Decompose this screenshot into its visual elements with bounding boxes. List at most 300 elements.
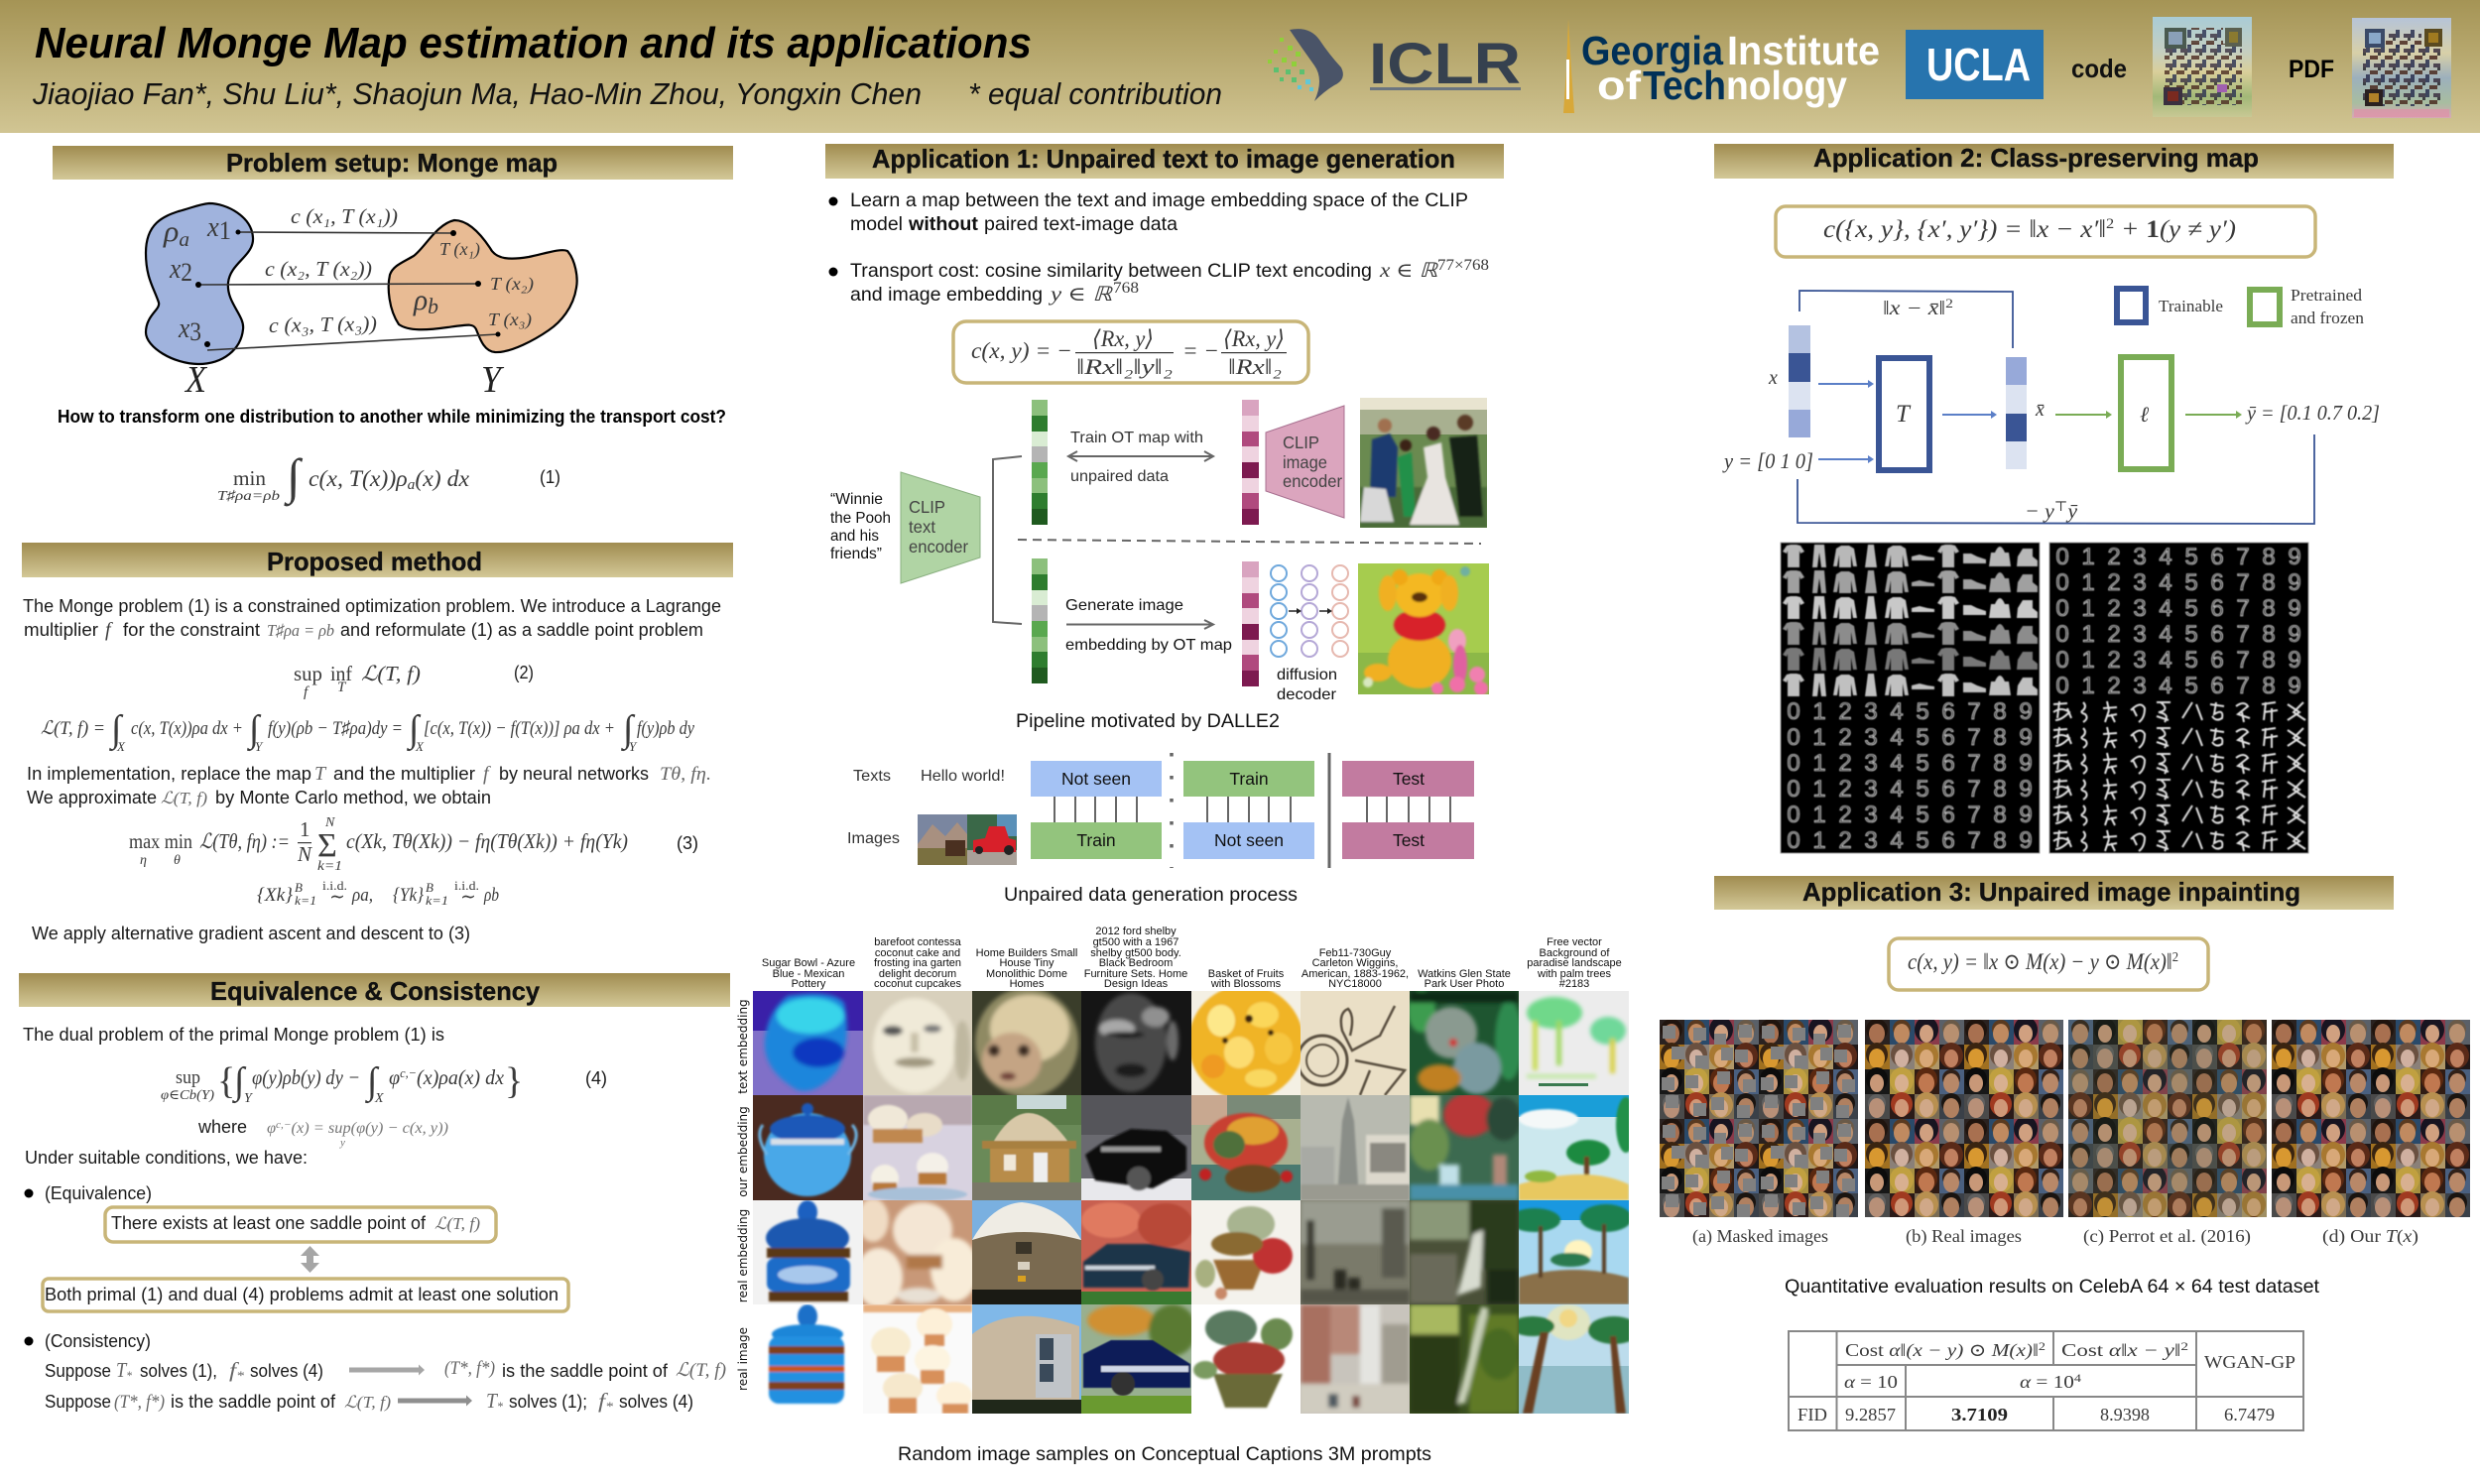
equation 3: max min bbox=[129, 829, 192, 853]
text embedding column top bbox=[1032, 400, 1048, 525]
table: FID results: 8.9398 bbox=[2100, 1405, 2150, 1424]
caption: quantitative evaluation: Quantitative evaluation results on CelebA 64 × 64 test dataset bbox=[1785, 1276, 2320, 1298]
image: palms text embedding bbox=[1519, 991, 1629, 1095]
group: test: Test bbox=[1393, 830, 1425, 850]
sampling definition: ρa, bbox=[351, 885, 373, 906]
sampling definition: B bbox=[295, 880, 303, 895]
output vector x-bar bbox=[2006, 357, 2045, 469]
diagram: Monge map between distributions: a bbox=[179, 229, 189, 251]
image: palms real embedding bbox=[1519, 1200, 1629, 1304]
heading: problem setup bbox=[53, 146, 733, 180]
callout: cosine cost equation: = − bbox=[1182, 338, 1219, 363]
image: city our embedding bbox=[1301, 1095, 1410, 1200]
heading: proposed method: Proposed method bbox=[267, 547, 482, 576]
equation 1: c(x, T(x))ρ bbox=[309, 466, 405, 491]
Lagrangian expansion: X bbox=[415, 739, 425, 754]
paragraph: Lagrange multiplier: The Monge problem (1) is a constrained optimization problem. We introduce a Lagrange bbox=[23, 595, 721, 616]
panel: problem setup bbox=[53, 146, 733, 507]
digit samples left: 0123456789 bbox=[1787, 698, 2033, 725]
consistency statement 2: (T*, f*) bbox=[114, 1392, 165, 1413]
paragraph: implementation: In implementation, replace the map bbox=[27, 763, 311, 784]
label: generate image bbox=[1065, 597, 1232, 654]
digit samples right: 0123456789 bbox=[2055, 595, 2301, 622]
loss bracket: classification: ⊤ bbox=[2054, 500, 2067, 515]
caption: unpaired data: Unpaired data generation process bbox=[1004, 884, 1298, 906]
paragraph: implementation: Tθ, fη. bbox=[660, 764, 711, 785]
Lagrangian expansion: X bbox=[116, 739, 126, 754]
loss bracket: classification: − y bbox=[2025, 499, 2053, 523]
diffusion decoder bbox=[1271, 565, 1348, 703]
callout: cosine cost equation: c(x, y) = − bbox=[971, 338, 1072, 363]
group: text not seen / image train: Not seen bbox=[1061, 769, 1131, 789]
heading: problem setup: Problem setup: Monge map bbox=[226, 148, 558, 178]
paragraph: implementation: We approximate bbox=[27, 787, 157, 807]
equation 4: X bbox=[374, 1091, 384, 1106]
equation 2 bbox=[294, 662, 534, 700]
column prompts: delight decorum bbox=[879, 968, 956, 980]
diagram: Monge map between distributions: c (x₂, T (x₂)) bbox=[265, 257, 372, 281]
prompt text bbox=[830, 491, 891, 562]
column prompts: with Blossoms bbox=[1210, 978, 1282, 990]
callout: class cost equation: 2 bbox=[2106, 216, 2114, 232]
image: cupcakes our embedding bbox=[863, 1095, 972, 1200]
bullet: transport cost: 768 bbox=[1113, 280, 1139, 297]
digit samples right: 0123456789 bbox=[2055, 647, 2301, 674]
heading: equivalence and consistency: Equivalence & Consistency bbox=[210, 976, 541, 1006]
equation 4: { bbox=[217, 1060, 235, 1102]
logo: Georgia Tech bbox=[1563, 19, 1880, 113]
column prompts: Basket of Fruits bbox=[1208, 968, 1285, 980]
diagram: unpaired data generation: Images bbox=[847, 830, 900, 847]
diagram: Monge map between distributions: T (x₃) bbox=[488, 309, 532, 330]
sampling definition: ∼ bbox=[460, 887, 476, 908]
label: train OT map bbox=[1068, 430, 1213, 485]
column prompts: Home Builders Small bbox=[976, 947, 1077, 959]
bullet: learn a map: Learn a map between the text and image embedding space of the CLIP bbox=[850, 189, 1468, 211]
Lagrangian expansion: ∫ bbox=[407, 708, 422, 752]
input vector x bbox=[1768, 325, 1810, 437]
digit samples right: 0123456789 bbox=[2055, 621, 2301, 648]
captions: inpainting figures: (b) Real images bbox=[1906, 1226, 2022, 1247]
consistency statement 2: Suppose bbox=[45, 1391, 111, 1412]
equation 4: φ∈Cb(Y) bbox=[161, 1088, 214, 1103]
image: sketch text embedding bbox=[1301, 991, 1410, 1095]
column prompts: coconut cupcakes bbox=[874, 978, 962, 990]
equation 4: (x)ρa(x) dx bbox=[417, 1065, 505, 1089]
diffusion decoder: decoder bbox=[1277, 686, 1337, 703]
heading: equivalence and consistency bbox=[19, 973, 730, 1007]
paragraph: implementation: f bbox=[483, 763, 491, 785]
paragraph: Lagrange multiplier bbox=[23, 595, 721, 641]
diagram: Monge map between distributions: T (x₁) bbox=[439, 239, 480, 260]
image: cupcakes text embedding bbox=[863, 991, 972, 1095]
frozen box l bbox=[2121, 357, 2171, 469]
equation 3: c(Xk, Tθ(Xk)) − fη(Tθ(Xk)) + fη(Yk) bbox=[346, 829, 628, 853]
consistency statement 2: solves (4) bbox=[619, 1391, 693, 1412]
captions: inpainting figures bbox=[1692, 1226, 2418, 1247]
callout: cosine cost equation bbox=[953, 321, 1308, 383]
sampling definition: ∼ bbox=[329, 887, 345, 908]
callout: saddle point exists bbox=[105, 1207, 496, 1242]
table: FID results: FID bbox=[1798, 1405, 1827, 1424]
column prompts: 2012 ford shelby bbox=[1095, 926, 1177, 937]
logo: ICLR: ICLR bbox=[1369, 32, 1521, 96]
legend: pretrained and frozen bbox=[2250, 286, 2365, 327]
where clause: φ bbox=[267, 1120, 276, 1137]
where clause: where bbox=[197, 1116, 247, 1137]
column prompts: with palm trees bbox=[1537, 968, 1611, 980]
callout: primal and dual solutions: Both primal (1) and dual (4) problems admit at least one solution bbox=[45, 1284, 558, 1304]
equation 2: sup bbox=[294, 662, 322, 685]
bullet: learn a map: paired text-image data bbox=[984, 213, 1178, 235]
column prompts: Free vector bbox=[1547, 936, 1602, 948]
equation 3: N bbox=[297, 842, 312, 866]
image: cupcakes real image bbox=[863, 1304, 972, 1414]
diagram: Monge map between distributions: 1 bbox=[219, 216, 231, 245]
diagram: unpaired data generation bbox=[847, 753, 1474, 868]
Lagrangian expansion: Y bbox=[255, 739, 264, 754]
Lagrangian expansion: [c(x, T(x)) − f(T(x))] ρa dx + bbox=[424, 718, 615, 739]
image: fruit real embedding bbox=[1191, 1200, 1301, 1304]
table: FID results: 9.2857 bbox=[1845, 1405, 1896, 1424]
image embedding column top bbox=[1242, 400, 1259, 525]
Lagrangian expansion: ∫ bbox=[109, 708, 124, 752]
arrow: equivalence both ways bbox=[301, 1246, 319, 1273]
transport lines bbox=[198, 232, 498, 350]
CLIP text encoder: text bbox=[909, 517, 935, 537]
bullet: transport cost: 77×768 bbox=[1437, 257, 1489, 274]
captions: inpainting figures: (c) Perrot et al. (2016) bbox=[2083, 1226, 2251, 1247]
equation 4: ∫ bbox=[365, 1060, 380, 1104]
image: yurt real image bbox=[972, 1304, 1081, 1414]
equation 3: (3) bbox=[677, 832, 698, 853]
figure: FashionMNIST and MNIST samples bbox=[1781, 543, 2308, 854]
equation 3: k=1 bbox=[317, 859, 342, 874]
column prompts: American, 1883-1962, bbox=[1302, 968, 1409, 980]
column prompts: Park User Photo bbox=[1425, 978, 1504, 990]
equation 2: ℒ(T, f) bbox=[361, 662, 421, 685]
column prompts: gt500 with a 1967 bbox=[1093, 936, 1178, 948]
diagram: Monge map between distributions: ρ bbox=[164, 215, 178, 248]
logo: Georgia Tech: of bbox=[1597, 62, 1641, 108]
table: FID results: α = 10 bbox=[1844, 1372, 1898, 1392]
bullet: consistency: (Consistency) bbox=[45, 1330, 151, 1351]
group: test: Test bbox=[1393, 769, 1425, 789]
image: city painting real image bbox=[1301, 1304, 1410, 1414]
image: dome text embedding bbox=[972, 991, 1081, 1095]
callout: saddle point exists: There exists at least one saddle point of bbox=[111, 1212, 427, 1233]
label: generate image: embedding by OT map bbox=[1065, 637, 1232, 654]
bullet: transport cost bbox=[829, 257, 1489, 306]
table: FID results: WGAN-GP bbox=[2204, 1352, 2295, 1372]
equation 4: ∫ bbox=[232, 1060, 247, 1104]
figure: real images bbox=[1865, 1020, 2063, 1217]
diffusion decoder: diffusion bbox=[1277, 667, 1337, 683]
text embedding column bottom bbox=[1032, 558, 1048, 683]
digit samples left: 0123456789 bbox=[1787, 750, 2033, 777]
logo: UCLA: UCLA bbox=[1926, 39, 2031, 90]
image: fruit our embedding bbox=[1191, 1095, 1301, 1200]
image: sugar bowl real embedding bbox=[753, 1200, 863, 1304]
heading: application 1: Application 1: Unpaired text to image generation bbox=[872, 144, 1455, 174]
header banner bbox=[0, 0, 2480, 133]
heading: application 2: Application 2: Class-preserving map bbox=[1813, 143, 2259, 173]
image: palms real image bbox=[1519, 1304, 1629, 1414]
image: monkey text embedding bbox=[1410, 991, 1519, 1095]
paragraph: Lagrange multiplier: multiplier bbox=[24, 619, 98, 640]
image: waterfall real embedding bbox=[1410, 1200, 1519, 1304]
sampling definition: i.i.d. bbox=[322, 878, 347, 893]
digit samples right: 0123456789 bbox=[2055, 569, 2301, 596]
sampling definition: ρb bbox=[483, 885, 499, 906]
table: FID results: Cost α‖(x − y) ⊙ M(x)‖ bbox=[1845, 1340, 2016, 1360]
paragraph: Lagrange multiplier: and reformulate (1) as a saddle point problem bbox=[340, 619, 703, 640]
sampling definition: {Xk} bbox=[257, 885, 293, 906]
equation 2: (2) bbox=[514, 662, 534, 682]
CLIP image encoder: image bbox=[1283, 452, 1327, 472]
group: test bbox=[1342, 761, 1474, 859]
image: street real embedding bbox=[1301, 1200, 1410, 1304]
paragraph: Lagrange multiplier: f bbox=[105, 619, 113, 641]
column prompts: House Tiny bbox=[999, 957, 1054, 969]
prompt text: the Pooh bbox=[830, 510, 891, 527]
heading: application 2 bbox=[1714, 143, 2394, 179]
consistency statement 2: * bbox=[605, 1399, 614, 1414]
QR code: PDF bbox=[2352, 18, 2451, 118]
diagram: Monge map between distributions: x bbox=[207, 212, 219, 243]
panel: application 1 bbox=[736, 144, 1640, 1465]
column prompts bbox=[762, 926, 1622, 990]
trainable box T: T bbox=[1896, 401, 1912, 428]
image: car our embedding bbox=[1081, 1095, 1191, 1200]
equation 3: ℒ(Tθ, fη) := bbox=[199, 829, 290, 853]
equation 2: f bbox=[304, 684, 310, 700]
consistency statement 1: solves (1), bbox=[140, 1360, 217, 1381]
diagram: unpaired data generation: Hello world! bbox=[921, 768, 1005, 785]
prompt text: friends” bbox=[830, 546, 882, 562]
table: FID results: 6.7479 bbox=[2224, 1405, 2275, 1424]
target distribution shape bbox=[389, 220, 577, 352]
group: text train / image not seen: Not seen bbox=[1214, 830, 1284, 850]
CLIP image encoder bbox=[1266, 406, 1344, 518]
digit samples right: 0123456789 bbox=[2055, 544, 2301, 570]
panel: application 2 bbox=[1714, 143, 2394, 854]
equation 3: Σ bbox=[317, 827, 337, 864]
column prompts: NYC18000 bbox=[1328, 978, 1382, 990]
diagram: Monge map between distributions: T (x₂) bbox=[490, 274, 534, 295]
panel: equivalence and consistency bbox=[19, 973, 730, 1414]
CLIP image encoder: CLIP bbox=[1283, 433, 1319, 452]
bullet: learn a map: model bbox=[850, 213, 903, 235]
sampling definition bbox=[257, 878, 499, 908]
equation 2: T bbox=[337, 680, 347, 695]
table: FID results: 2 bbox=[2180, 1339, 2188, 1353]
consistency statement 1: * bbox=[236, 1368, 245, 1383]
bullet: equivalence: (Equivalence) bbox=[45, 1182, 152, 1203]
authors: Jiaojiao Fan*, Shu Liu*, Shaojun Ma, Hao-Min Zhou, Yongxin Chen bbox=[32, 76, 922, 111]
image: sugar bowl text embedding bbox=[753, 991, 863, 1095]
diagram: DALLE2 pipeline bbox=[830, 398, 1489, 703]
group: text not seen / image train bbox=[1031, 761, 1162, 859]
caption: pipeline: Pipeline motivated by DALLE2 bbox=[1016, 710, 1280, 732]
equation 4: φ bbox=[389, 1065, 401, 1089]
paragraph: implementation: by neural networks bbox=[499, 763, 649, 784]
label: train OT map: unpaired data bbox=[1070, 468, 1169, 485]
CLIP text encoder: encoder bbox=[909, 537, 968, 556]
loss bracket: classification bbox=[1798, 434, 2314, 524]
consistency statement 2 bbox=[45, 1389, 693, 1414]
captions: inpainting figures: (d) Our T(x) bbox=[2322, 1226, 2418, 1247]
Lagrangian expansion: ∫ bbox=[247, 708, 262, 752]
Lagrangian expansion: Y bbox=[629, 739, 638, 754]
consistency statement 2: T bbox=[486, 1389, 498, 1413]
Lagrangian expansion: f(y)(ρb − T♯ρa)dy = bbox=[268, 718, 403, 739]
paragraph: implementation: by Monte Carlo method, we obtain bbox=[215, 787, 491, 807]
column prompts: Sugar Bowl - Azure bbox=[762, 957, 855, 969]
callout: cosine cost equation: ⟨Rx, y⟩ bbox=[1223, 326, 1285, 351]
row labels: our embedding bbox=[736, 1106, 750, 1197]
equation 3: 1 bbox=[300, 817, 310, 841]
Lagrangian expansion bbox=[41, 708, 694, 754]
callout: inpainting cost equation: 2 bbox=[2172, 950, 2178, 965]
column prompts: Design Ideas bbox=[1104, 978, 1169, 990]
callout: cosine cost equation: ‖Rx‖₂ bbox=[1228, 354, 1282, 379]
digit samples left: 0123456789 bbox=[1787, 802, 2033, 828]
column prompts: #2183 bbox=[1559, 978, 1589, 990]
equation 4: Y bbox=[244, 1091, 254, 1106]
sampling definition: {Yk} bbox=[393, 885, 424, 906]
sampling definition: k=1 bbox=[426, 893, 448, 908]
column prompts: Feb11-730Guy bbox=[1319, 947, 1392, 959]
consistency statement 2: ℒ(T, f) bbox=[344, 1393, 391, 1412]
captions: inpainting figures: (a) Masked images bbox=[1692, 1226, 1828, 1247]
equation 4: φ(y)ρb(y) dy − bbox=[252, 1065, 360, 1089]
equation 1: T♯ρa=ρb bbox=[217, 489, 280, 504]
column prompts: Homes bbox=[1010, 978, 1045, 990]
digit samples left: 0123456789 bbox=[1787, 724, 2033, 751]
CLIP image encoder: encoder bbox=[1283, 471, 1342, 491]
group: text train / image not seen: Train bbox=[1229, 769, 1269, 789]
table: FID results: Cost α‖x − y‖ bbox=[2061, 1340, 2166, 1360]
heading: proposed method bbox=[22, 543, 733, 577]
consistency statement 1: f bbox=[229, 1358, 235, 1382]
column prompts: Black Bedroom bbox=[1099, 957, 1173, 969]
image: house our embedding bbox=[972, 1095, 1081, 1200]
column prompts: Carleton Wiggins, bbox=[1312, 957, 1398, 969]
paragraph: Lagrange multiplier: for the constraint bbox=[123, 619, 260, 640]
text: alternative gradient: We apply alternative gradient ascent and descent to (3) bbox=[32, 923, 470, 943]
label: y one-hot: y = [0 1 0] bbox=[1722, 448, 1813, 473]
paragraph: implementation bbox=[27, 763, 711, 807]
paragraph: implementation: ℒ(T, f) bbox=[161, 789, 207, 807]
callout: cosine cost equation: ‖Rx‖₂‖y‖₂ bbox=[1076, 354, 1173, 379]
equation 4 bbox=[161, 1060, 607, 1106]
callout: primal and dual solutions bbox=[43, 1279, 568, 1311]
consistency statement 1 bbox=[45, 1358, 726, 1383]
logo: Georgia Tech: Institute bbox=[1727, 28, 1880, 73]
diagram: class-preserving architecture bbox=[1722, 286, 2380, 524]
Lagrangian expansion: ∫ bbox=[621, 708, 636, 752]
equation 1 bbox=[217, 448, 560, 507]
image embedding column bottom bbox=[1242, 561, 1259, 686]
equation 4: sup bbox=[176, 1067, 200, 1088]
digit samples right: 0123456789 bbox=[2055, 673, 2301, 699]
equation 3: η bbox=[140, 853, 147, 868]
image: yurt real embedding bbox=[972, 1200, 1081, 1304]
digit samples left: 0123456789 bbox=[1787, 776, 2033, 803]
sampling definition: i.i.d. bbox=[454, 878, 479, 893]
column prompts: Watkins Glen State bbox=[1418, 968, 1511, 980]
callout: inpainting cost equation bbox=[1889, 938, 2208, 990]
diagram: Monge map between distributions: x bbox=[170, 254, 182, 285]
Lagrangian expansion: ℒ(T, f) = bbox=[41, 718, 105, 739]
bullet: transport cost: y ∈ ℝ bbox=[1048, 284, 1113, 306]
logo: Georgia Tech: Georgia bbox=[1581, 28, 1724, 73]
column prompts: coconut cake and bbox=[875, 947, 960, 959]
loss bracket: reconstruction: ‖x − x̄‖ bbox=[1883, 298, 1934, 319]
equation 1: (1) bbox=[540, 466, 560, 487]
image: cupcakes real embedding bbox=[863, 1200, 972, 1304]
figure: our T(x) results bbox=[2272, 1020, 2470, 1217]
Lagrangian expansion: c(x, T(x))ρa dx + bbox=[131, 718, 243, 739]
row labels: real embedding bbox=[736, 1209, 750, 1302]
logo: ICLR bbox=[1268, 29, 1521, 101]
paragraph: Lagrange multiplier: T♯ρa = ρb bbox=[267, 621, 334, 640]
consistency statement 1: T bbox=[116, 1358, 128, 1382]
text: dual problem: The dual problem of the primal Monge problem (1) is bbox=[23, 1024, 444, 1045]
consistency statement 2: f bbox=[598, 1389, 604, 1413]
equation 4: c,− bbox=[400, 1065, 417, 1080]
poster title: Neural Monge Map estimation and its applications bbox=[35, 19, 1032, 67]
question text: How to transform one distribution to another while minimizing the transport cost? bbox=[58, 406, 726, 427]
equation 1: a bbox=[408, 477, 415, 493]
column prompts: Blue - Mexican bbox=[773, 968, 844, 980]
equation 4: (4) bbox=[585, 1067, 607, 1088]
equation 3: θ bbox=[174, 853, 181, 868]
image: car real image bbox=[1081, 1304, 1191, 1414]
diagram: unpaired data generation: Texts bbox=[853, 768, 891, 785]
where clause: c,− bbox=[276, 1119, 291, 1131]
column prompts: paradise landscape bbox=[1527, 957, 1622, 969]
CLIP text encoder bbox=[901, 472, 980, 583]
where clause: y bbox=[339, 1137, 345, 1149]
digit samples left: 0123456789 bbox=[1787, 827, 2033, 854]
trainable box T bbox=[1879, 358, 1929, 470]
group: text train / image not seen bbox=[1183, 761, 1314, 859]
heading: application 3: Application 3: Unpaired image inpainting bbox=[1802, 877, 2300, 907]
prompt text: “Winnie bbox=[830, 491, 883, 508]
diagram: Monge map between distributions: x bbox=[179, 313, 190, 344]
where clause bbox=[197, 1116, 448, 1149]
table: FID results bbox=[1789, 1331, 2303, 1430]
logo: Georgia Tech: nology bbox=[1726, 62, 1847, 108]
label: train OT map: Train OT map with bbox=[1070, 430, 1203, 446]
logo: UCLA bbox=[1906, 30, 2044, 99]
bullet: transport cost: and image embedding bbox=[850, 284, 1043, 306]
equation 3 bbox=[129, 815, 698, 874]
bullet: learn a map: without bbox=[908, 213, 979, 235]
image: sugar bowl real image bbox=[767, 1304, 846, 1406]
CLIP text encoder: CLIP bbox=[909, 497, 945, 517]
equation 3: N bbox=[324, 815, 335, 830]
bullet: transport cost: Transport cost: cosine similarity between CLIP text encoding bbox=[850, 260, 1372, 282]
where clause: (x) = sup(φ(y) − c(x, y)) bbox=[291, 1120, 448, 1137]
label: PDF: PDF bbox=[2289, 56, 2334, 83]
table: FID results: 2 bbox=[2039, 1339, 2046, 1353]
column prompts: Furniture Sets. Home bbox=[1084, 968, 1187, 980]
consistency statement 1: solves (4) bbox=[250, 1360, 323, 1381]
label: y-bar: ȳ = [0.1 0.7 0.2] bbox=[2245, 401, 2380, 425]
